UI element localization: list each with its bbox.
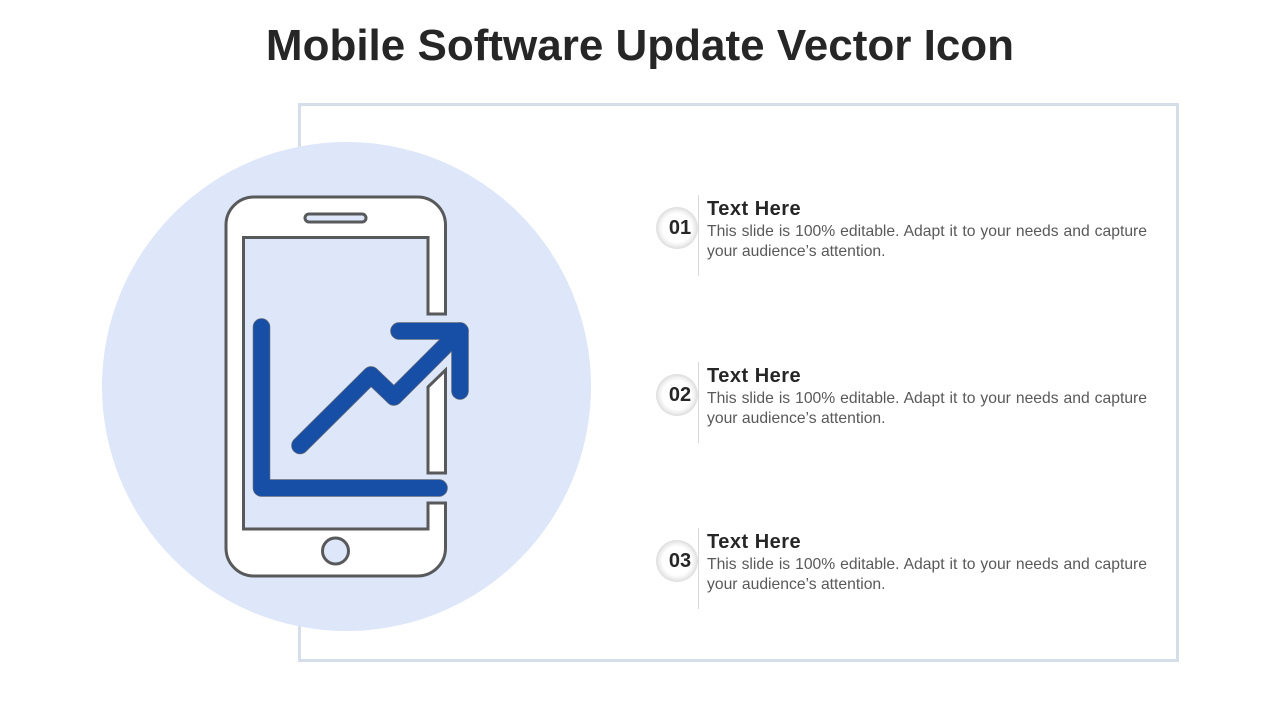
description 01 — [707, 223, 1147, 260]
item 01 — [656, 195, 1147, 276]
background circle — [102, 142, 591, 631]
description 03 — [707, 556, 1147, 593]
description 02: This slide is 100% editable. Adapt it to your needs and capture — [707, 390, 1147, 407]
divider — [698, 362, 699, 443]
description 03: This slide is 100% editable. Adapt it to your needs and capture — [707, 556, 1147, 573]
description 02 — [707, 390, 1147, 427]
title: Mobile Software Update Vector Icon — [266, 21, 1014, 70]
phone body — [226, 197, 446, 576]
badge 03: 03 — [669, 550, 691, 572]
description 01: your audience’s attention. — [707, 243, 886, 260]
description 03: your audience’s attention. — [707, 576, 886, 593]
item 03 — [656, 528, 1147, 609]
heading 03: Text Here — [707, 531, 801, 553]
chart axes and arrow — [262, 327, 460, 488]
badge 01: 01 — [669, 217, 691, 239]
divider — [698, 528, 699, 609]
description 01: This slide is 100% editable. Adapt it to your needs and capture — [707, 223, 1147, 240]
badge 03 — [656, 540, 698, 582]
badge 02: 02 — [669, 384, 691, 406]
item 02 — [656, 362, 1147, 443]
badge 01 — [656, 207, 698, 249]
content frame — [298, 103, 1179, 662]
heading 01: Text Here — [707, 198, 801, 220]
badge 02 — [656, 374, 698, 416]
divider — [698, 195, 699, 276]
description 02: your audience’s attention. — [707, 410, 886, 427]
heading 02: Text Here — [707, 365, 801, 387]
